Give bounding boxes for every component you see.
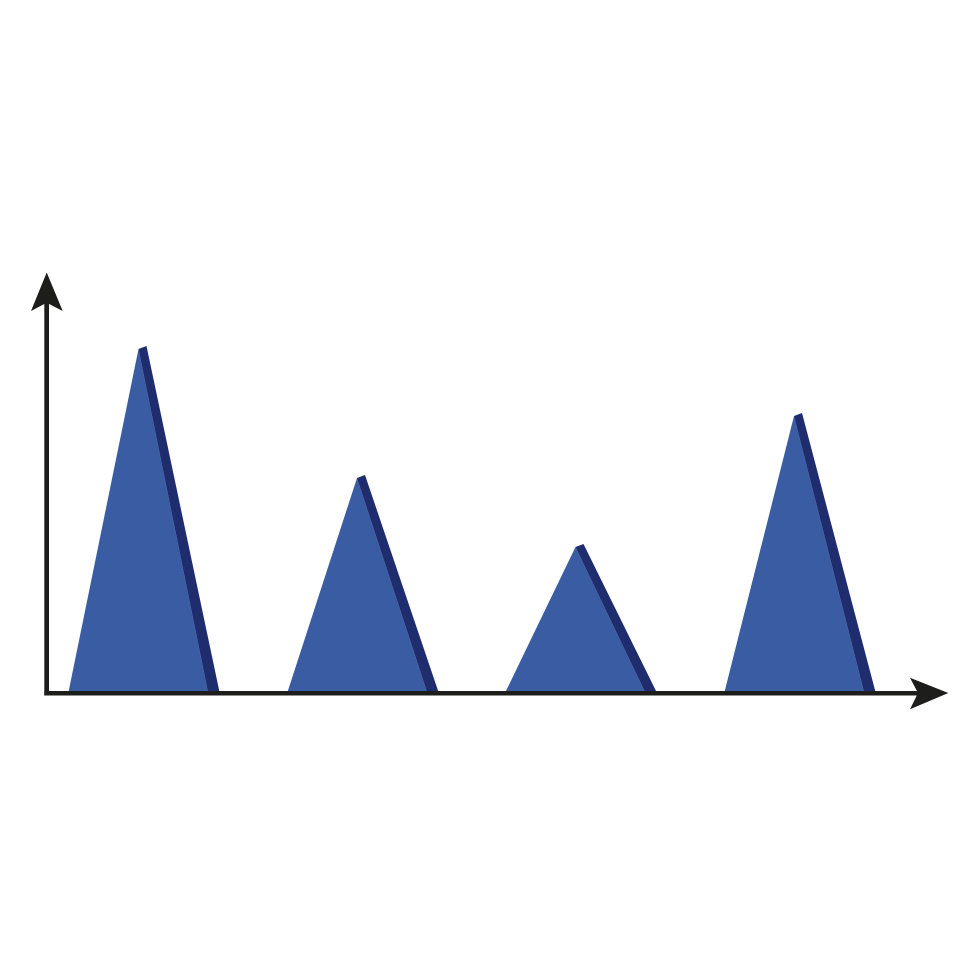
x axis arrow xyxy=(44,678,948,709)
bar 3 xyxy=(506,544,656,692)
bar 2 xyxy=(288,475,438,692)
y axis arrow xyxy=(31,272,63,696)
bar 1 xyxy=(68,346,220,692)
bar 4 xyxy=(724,413,876,692)
